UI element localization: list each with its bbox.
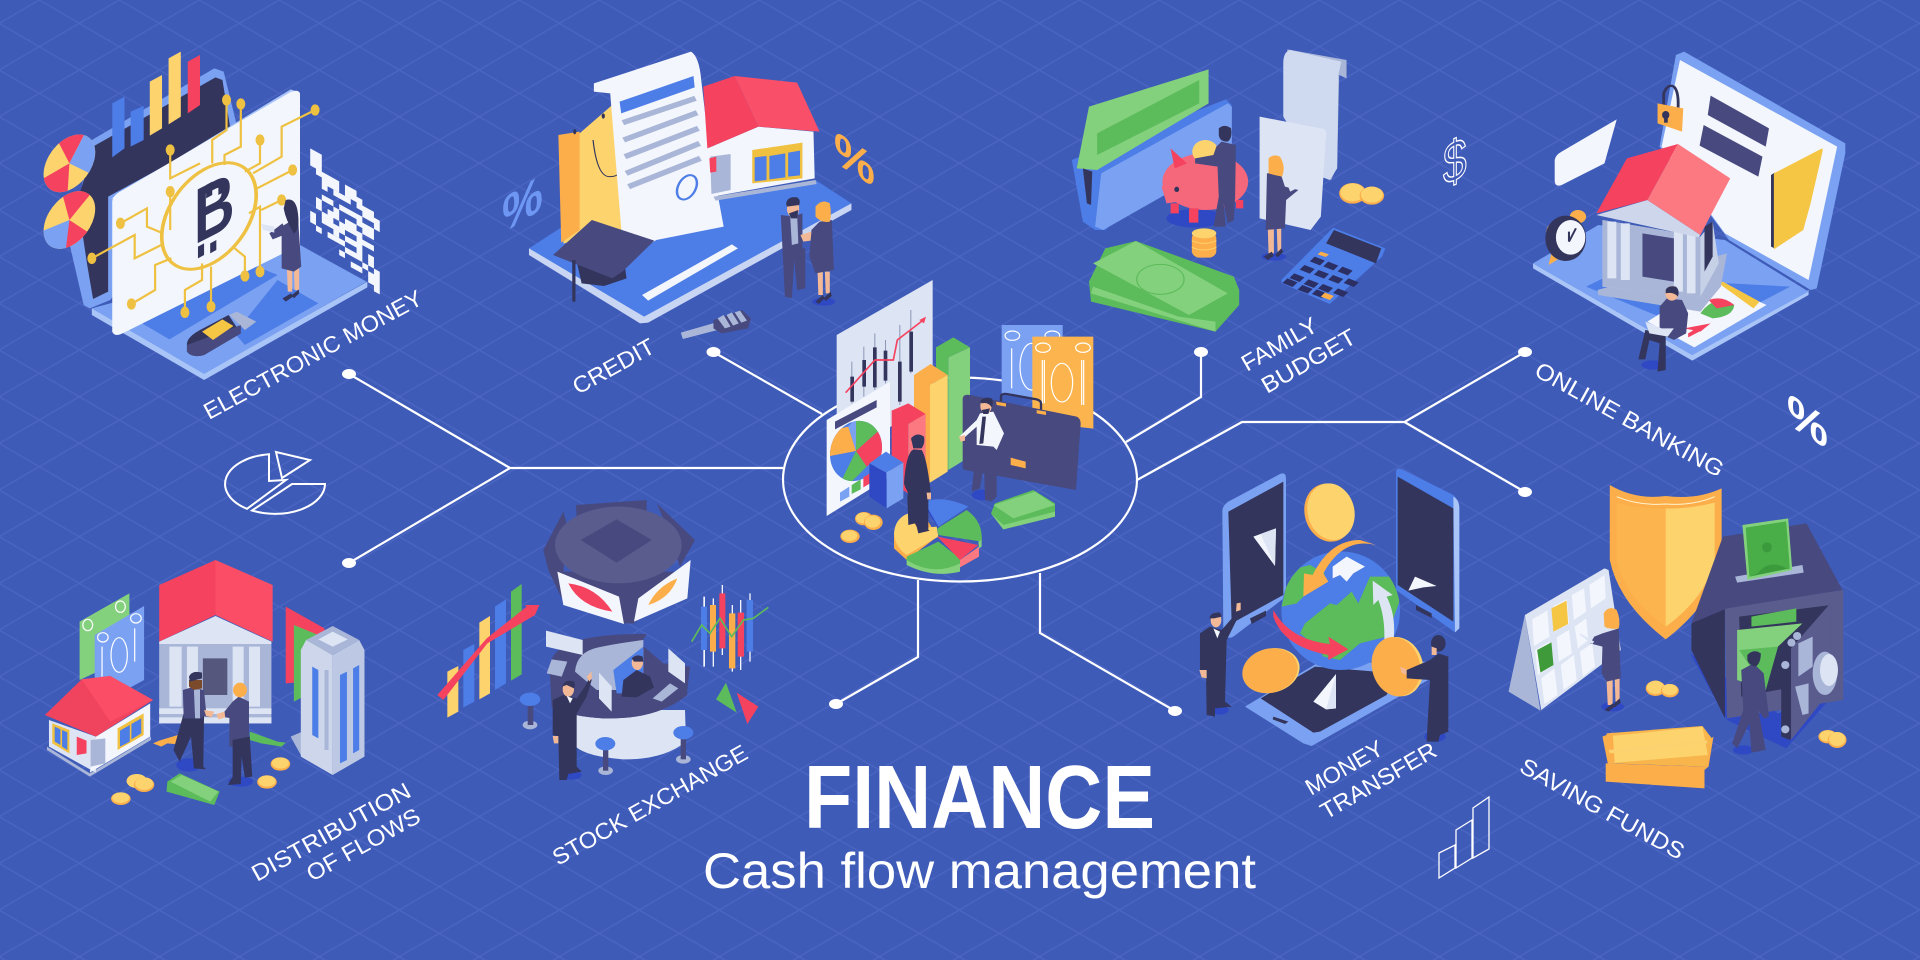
man on pie — [904, 435, 931, 533]
briefcase — [963, 394, 1081, 490]
icon: pie outline — [225, 452, 325, 514]
scene: distribution of flows — [45, 560, 364, 805]
small house — [45, 676, 153, 777]
scene: stock exchange — [437, 500, 768, 780]
title: FINANCE — [804, 748, 1155, 848]
house — [703, 76, 820, 201]
speech bubble — [1555, 119, 1617, 186]
bar columns — [869, 337, 970, 508]
coin left — [1237, 642, 1305, 699]
label: budget: BUDGET — [1256, 323, 1360, 398]
shield — [1610, 485, 1722, 639]
icon: percent white: % — [1787, 382, 1828, 460]
padlock — [1658, 86, 1683, 132]
label: credit: CREDIT — [568, 333, 659, 399]
bitcoin circuit — [87, 94, 320, 318]
coins — [840, 512, 883, 543]
phone flat — [1245, 662, 1428, 746]
3D pie chart — [894, 499, 982, 574]
scene: hub chart cluster — [827, 280, 1093, 574]
circular arrows — [1273, 540, 1394, 660]
label: family: FAMILY — [1236, 312, 1322, 376]
globe — [1281, 551, 1400, 670]
screen panel — [111, 89, 300, 335]
label: of flows: OF FLOWS — [302, 803, 425, 886]
coin top — [1298, 478, 1361, 547]
subtitle: Cash flow management — [703, 843, 1256, 899]
handshake couple — [781, 197, 835, 306]
laptop base — [1533, 225, 1809, 361]
man with laptop — [1638, 286, 1688, 372]
woman with tablet — [261, 199, 303, 304]
banknote stack — [991, 490, 1055, 529]
label: online banking: ONLINE BANKING — [1531, 357, 1729, 482]
scene: online banking — [1533, 52, 1845, 372]
man left — [1199, 603, 1242, 717]
coins — [111, 757, 290, 805]
label: transfer: TRANSFER — [1316, 737, 1441, 824]
scene: credit — [529, 52, 851, 339]
top display ring — [543, 500, 695, 624]
car key — [681, 310, 751, 339]
stools — [520, 693, 693, 775]
man in white shirt — [959, 398, 1004, 502]
man with coin — [1192, 126, 1236, 227]
scene: electronic money — [37, 52, 380, 380]
coins near safe — [1646, 681, 1847, 748]
floating bars — [112, 52, 200, 157]
trading desk — [546, 631, 690, 759]
gold bars — [1602, 726, 1713, 788]
laptop screen — [1660, 52, 1845, 290]
man waving — [553, 672, 592, 780]
scene: money transfer — [1199, 469, 1459, 746]
woman at calendar — [1580, 608, 1624, 712]
coin right — [1365, 631, 1430, 702]
banknotes left — [80, 593, 144, 707]
man right — [1400, 635, 1448, 742]
icon: bar outline — [1439, 797, 1489, 878]
phone left — [1222, 473, 1286, 638]
woman with note — [1262, 155, 1307, 261]
banknotes on ground — [167, 773, 220, 805]
bank — [159, 560, 273, 723]
bank building — [1596, 144, 1730, 312]
icon: percent orange: % — [834, 120, 875, 198]
coins — [1339, 183, 1384, 205]
two businessmen — [173, 672, 253, 787]
contract paper — [594, 52, 724, 258]
label: saving funds: SAVING FUNDS — [1516, 753, 1689, 865]
bitcoin letter: B — [194, 155, 235, 263]
graduation cap — [553, 220, 654, 302]
receipts — [1260, 49, 1347, 230]
alarm clock — [1545, 210, 1586, 265]
pie tokens — [44, 134, 96, 249]
connector lines and hub ring — [342, 347, 1532, 716]
candlestick chart — [692, 585, 768, 672]
banknotes — [1002, 325, 1093, 429]
phone right — [1396, 469, 1459, 632]
label: electronic money: ELECTRONIC MONEY — [199, 285, 427, 424]
banknotes right — [286, 607, 324, 702]
label: distribution: DISTRIBUTION — [247, 777, 415, 886]
USB token — [187, 312, 256, 356]
laptop base — [92, 242, 367, 380]
flow arrows — [153, 732, 286, 747]
credit card base — [529, 180, 851, 323]
document with charts — [1647, 280, 1767, 347]
up down triangles — [716, 683, 758, 724]
skyscraper — [291, 626, 364, 775]
calculator — [1281, 228, 1385, 304]
scene: family budget — [1072, 69, 1248, 332]
safe — [1690, 518, 1843, 748]
icon: percent blue: % — [502, 164, 543, 246]
chart panel — [837, 280, 933, 457]
pie report — [827, 382, 890, 516]
label: stock exchange: STOCK EXCHANGE — [548, 739, 752, 870]
man at safe — [1732, 651, 1769, 755]
piggy bank — [1162, 148, 1248, 228]
shopping bag — [558, 105, 626, 243]
coin stack — [1192, 228, 1216, 258]
banknote pile — [1089, 241, 1239, 332]
calendar — [1509, 568, 1621, 711]
laptop lid — [69, 68, 239, 308]
icon: dollar: $ — [1443, 125, 1467, 199]
scene: saving funds — [1509, 485, 1847, 788]
QR code — [310, 148, 380, 294]
growth bars with arrow — [437, 584, 539, 718]
wallet with cash — [1072, 69, 1232, 230]
label: money: MONEY — [1300, 735, 1388, 800]
